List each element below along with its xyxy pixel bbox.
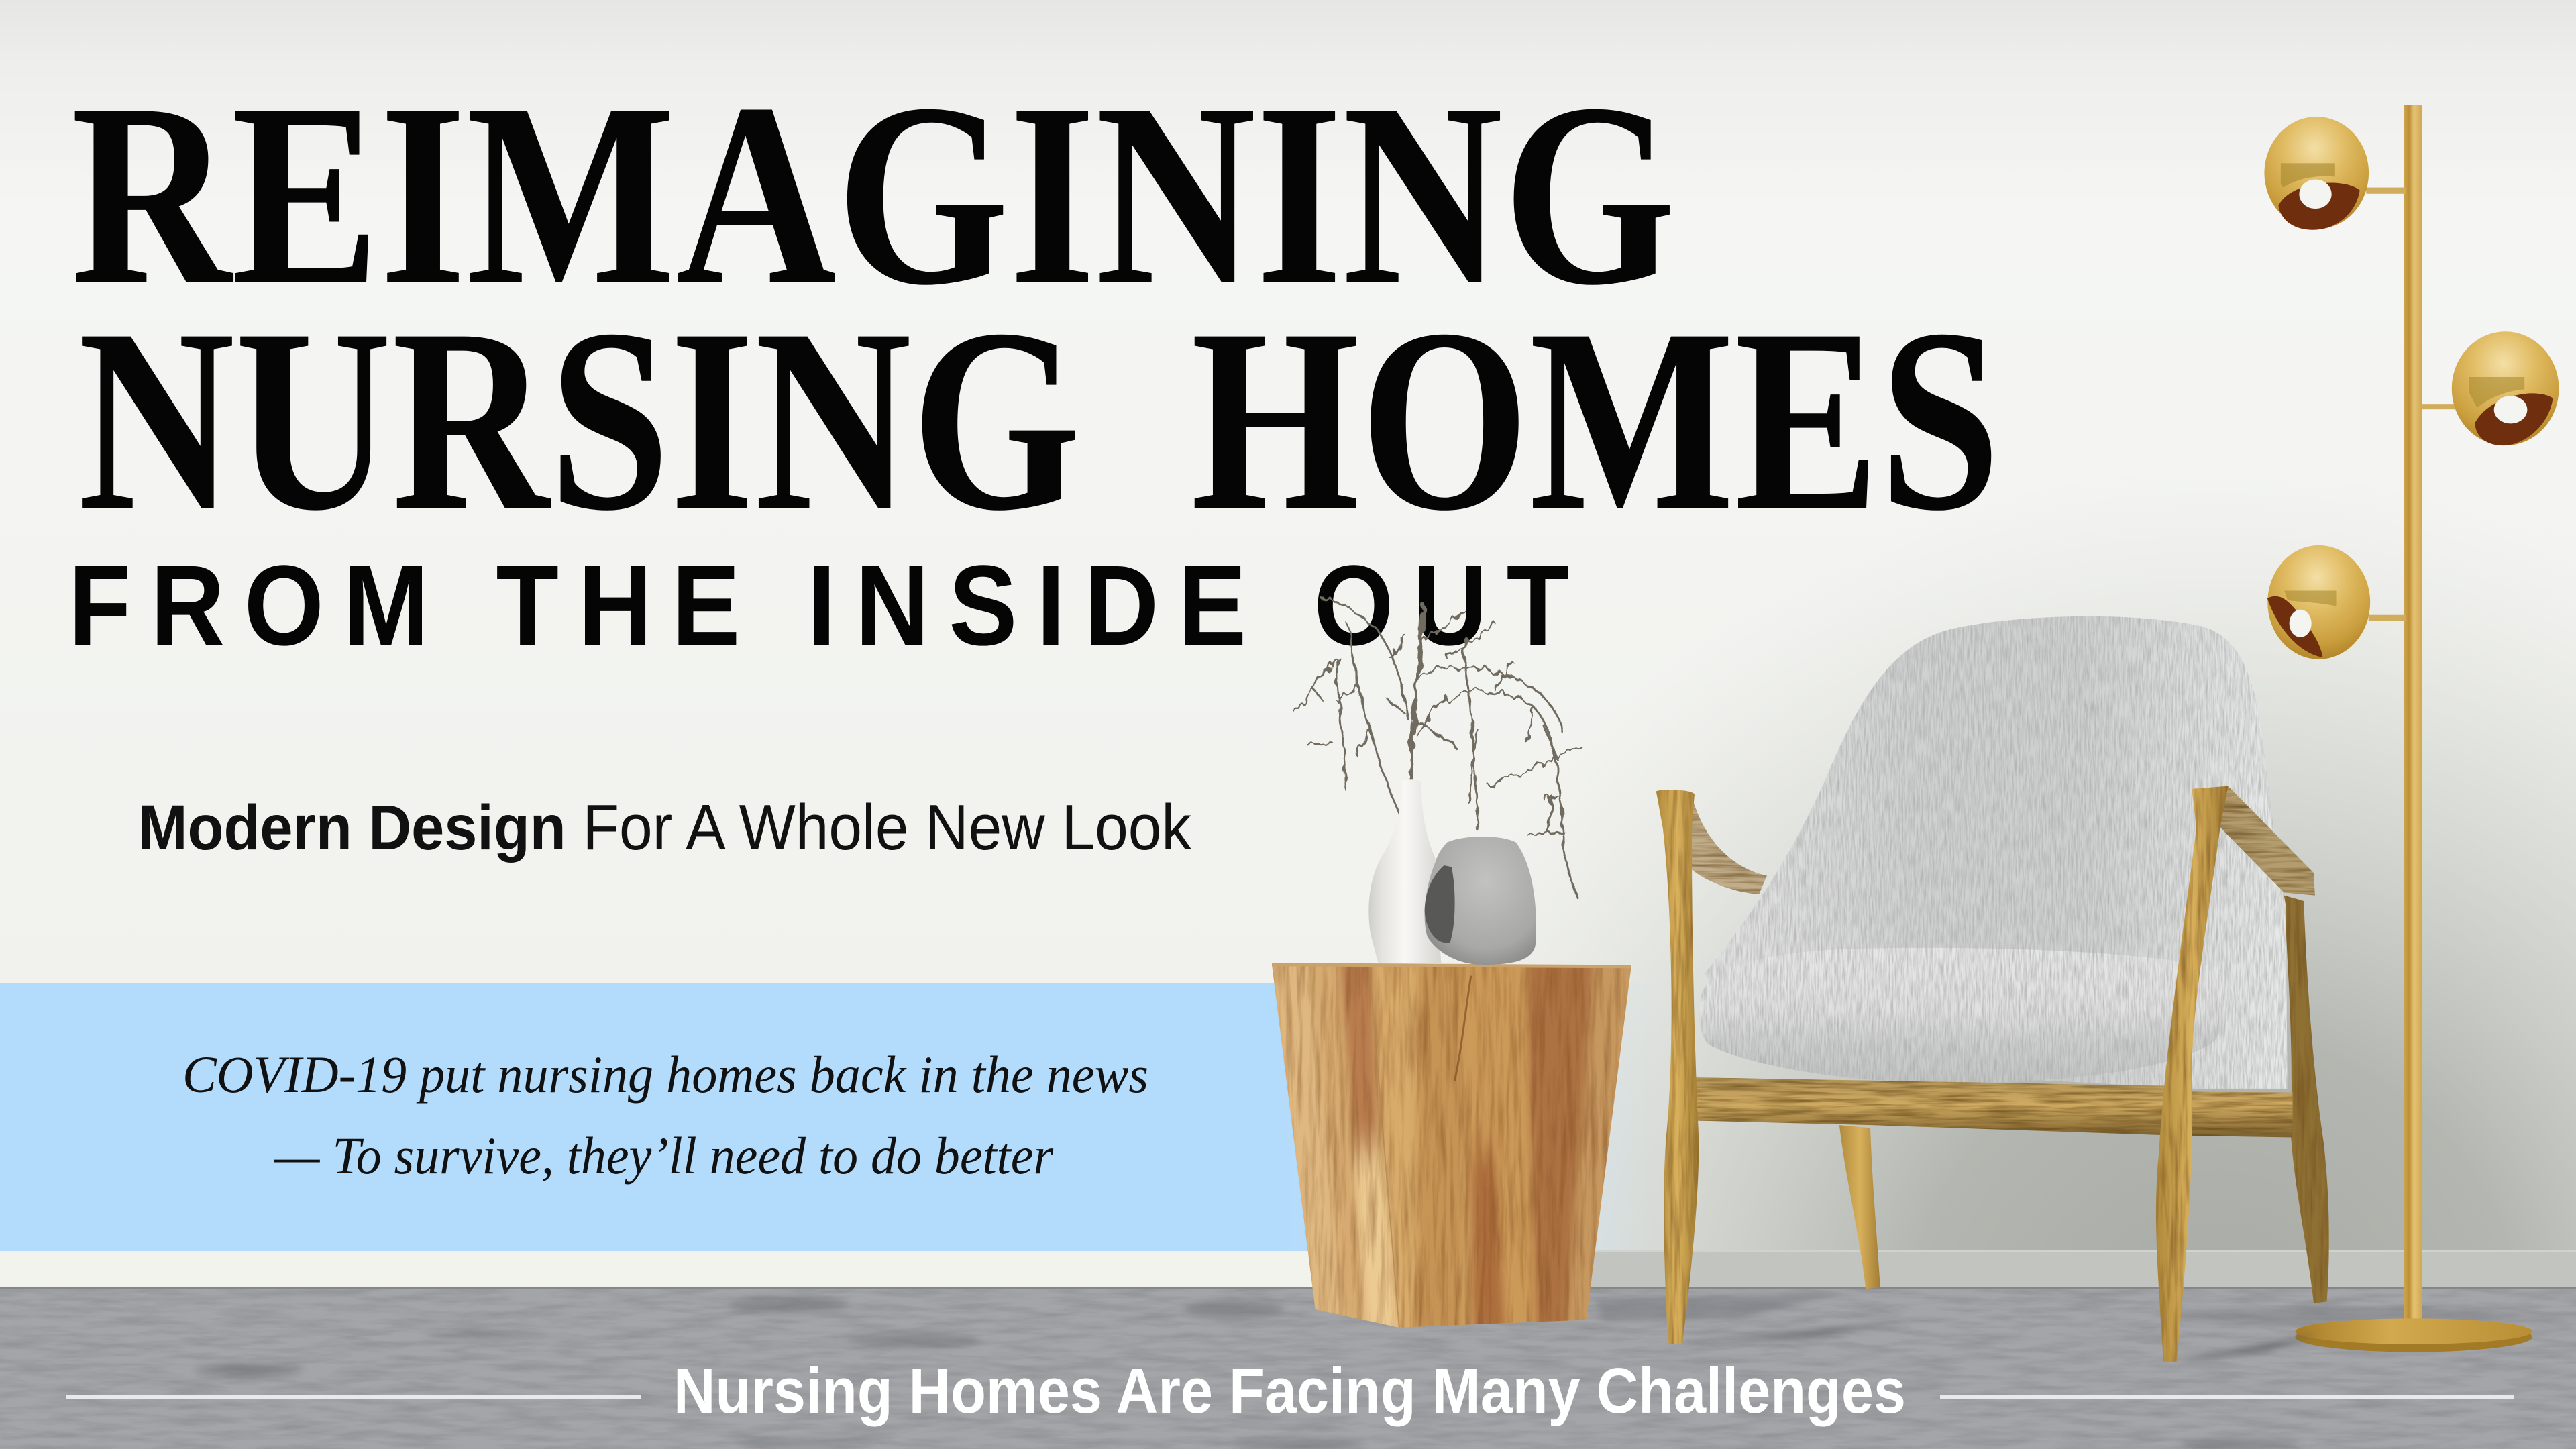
title line 2: NURSING HOMES — [78, 275, 2000, 565]
quote text — [182, 1045, 1148, 1185]
right front leg — [2156, 786, 2228, 1362]
chair back — [1705, 616, 2288, 1089]
vase with dried branches — [1296, 598, 1582, 965]
left arm — [1689, 794, 1767, 894]
baseboard — [0, 1250, 2576, 1289]
floor lamp — [2174, 105, 2559, 1352]
blue quote band — [0, 983, 1677, 1251]
right arm — [2218, 786, 2315, 896]
back rear leg — [1839, 1125, 1880, 1289]
bottom section heading — [66, 1355, 2514, 1427]
lamp base — [2295, 1318, 2532, 1352]
stone hole — [1425, 865, 1455, 943]
left front leg — [1656, 790, 1699, 1344]
chair rail — [1696, 1077, 2293, 1138]
subtitle: Modern Design For A Whole New Look — [138, 792, 1192, 863]
quote text: COVID-19 put nursing homes back in the news — [182, 1045, 1148, 1104]
title line 3: FROM THE INSIDE OUT — [68, 542, 1589, 669]
chair seat — [1699, 948, 2227, 1083]
armchair — [1596, 616, 2329, 1362]
white vase — [1368, 779, 1441, 963]
bottom section heading: Nursing Homes Are Facing Many Challenges — [674, 1355, 1906, 1427]
title line 1: REIMAGINING — [71, 50, 1676, 339]
chair floor shadows — [1596, 1293, 2320, 1360]
quote text: — To survive, they’ll need to do better — [274, 1126, 1054, 1185]
floor — [0, 1287, 2576, 1449]
side table — [1272, 963, 1631, 1328]
stone vessel — [1425, 837, 1536, 965]
right rear leg — [2284, 896, 2329, 1303]
lamp heads — [2264, 117, 2559, 659]
branches — [1296, 598, 1582, 899]
lamp pole — [2404, 105, 2422, 1326]
